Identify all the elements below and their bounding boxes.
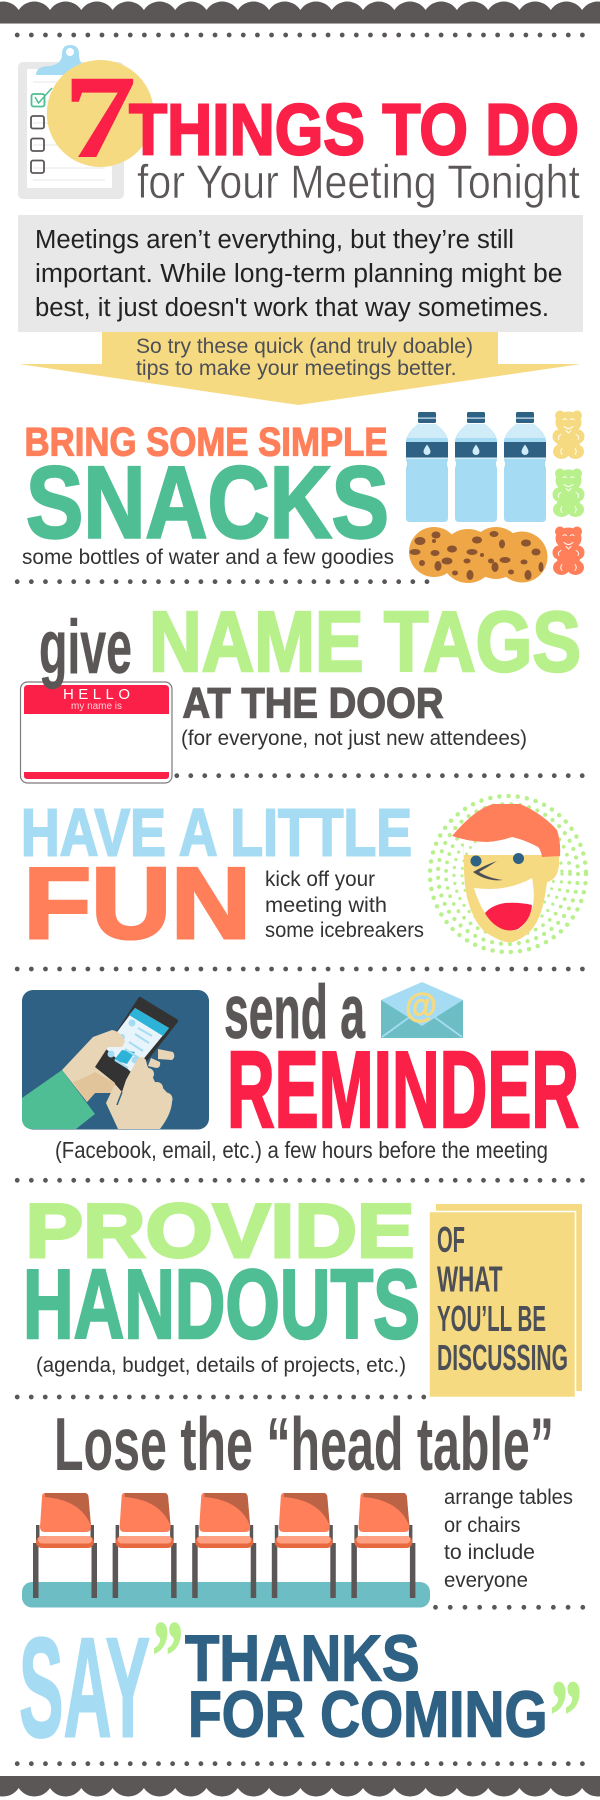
panel: say thanks (19, 1565, 582, 1771)
panel: intro text: Meetings aren’t everything, but they’re still (35, 226, 514, 254)
text block: (Facebook, email, etc.) a few hours before the meeting (55, 1137, 548, 1163)
text block (265, 868, 424, 942)
big number 7: 7 (64, 52, 136, 182)
arrow callout: tips to make your meetings better. (136, 357, 456, 380)
icon: row of chairs on bench (22, 1493, 430, 1608)
top scalloped band (0, 1, 600, 24)
dots behind note (17, 1395, 424, 1399)
panel: intro text: best, it just doesn't work that way sometimes. (35, 294, 549, 322)
bottom scalloped band (0, 1776, 600, 1797)
text block (444, 1485, 573, 1592)
text block: to include (444, 1540, 535, 1564)
icon: name tag: HELLO (63, 686, 130, 703)
note: yellow paper stack: WHAT (437, 1258, 503, 1300)
panel: snacks (22, 410, 584, 583)
icon: gummy bears (552, 410, 584, 575)
icon: cookies (409, 527, 548, 583)
panel: handouts (17, 1189, 582, 1398)
heading: BRING SOME SIMPLE (24, 420, 388, 464)
text block: everyone (444, 1568, 528, 1592)
heading: HAVE A LITTLE (21, 796, 412, 870)
panel: name tags (20, 595, 581, 783)
heading: HANDOUTS (23, 1249, 420, 1359)
icon: water bottles (406, 412, 546, 522)
panel: reminder (22, 970, 579, 1163)
text block: (for everyone, not just new attendees) (181, 727, 527, 750)
heading: PROVIDE (26, 1189, 414, 1274)
heading: FUN (24, 848, 251, 960)
text block: kick off your (265, 868, 375, 891)
text block: or chairs (444, 1513, 520, 1537)
text block: some bottles of water and a few goodies (22, 546, 394, 569)
opening quote: “ (152, 1565, 184, 1676)
panel: head table (22, 1402, 573, 1608)
text block: meeting with (265, 894, 387, 917)
icon: clipboard checklist (18, 45, 124, 199)
heading: THANKS (185, 1622, 420, 1694)
note: yellow paper stack (429, 1204, 582, 1398)
heading: SNACKS (26, 446, 389, 560)
text block: some icebreakers (265, 919, 424, 942)
header (18, 45, 580, 208)
panel: have fun (21, 796, 586, 960)
panel: intro text (18, 215, 583, 332)
text block: arrange tables (444, 1485, 573, 1509)
text block: (agenda, budget, details of projects, etc.) (36, 1353, 406, 1377)
icon: phone in hands (22, 990, 209, 1130)
word: send a: send a (224, 970, 365, 1055)
icon: email envelope (381, 982, 463, 1038)
note: yellow paper stack: OF (437, 1219, 465, 1260)
heading: FOR COMING (188, 1678, 548, 1750)
closing quote: ” (550, 1660, 582, 1771)
icon: yellow circle behind 7 (47, 60, 154, 167)
arrow callout (19, 332, 581, 405)
icon: name tag (20, 682, 172, 783)
icon: email envelope: @ (405, 987, 437, 1025)
arrow callout: So try these quick (and truly doable) (136, 335, 473, 358)
panel: intro text: important. While long-term planning might be (35, 260, 562, 288)
word: give: give (39, 605, 132, 690)
icon: name tag: my name is (71, 701, 122, 712)
icon: laughing face (430, 796, 586, 952)
panel: say thanks: SAY (19, 1608, 150, 1768)
heading: AT THE DOOR (182, 680, 444, 728)
